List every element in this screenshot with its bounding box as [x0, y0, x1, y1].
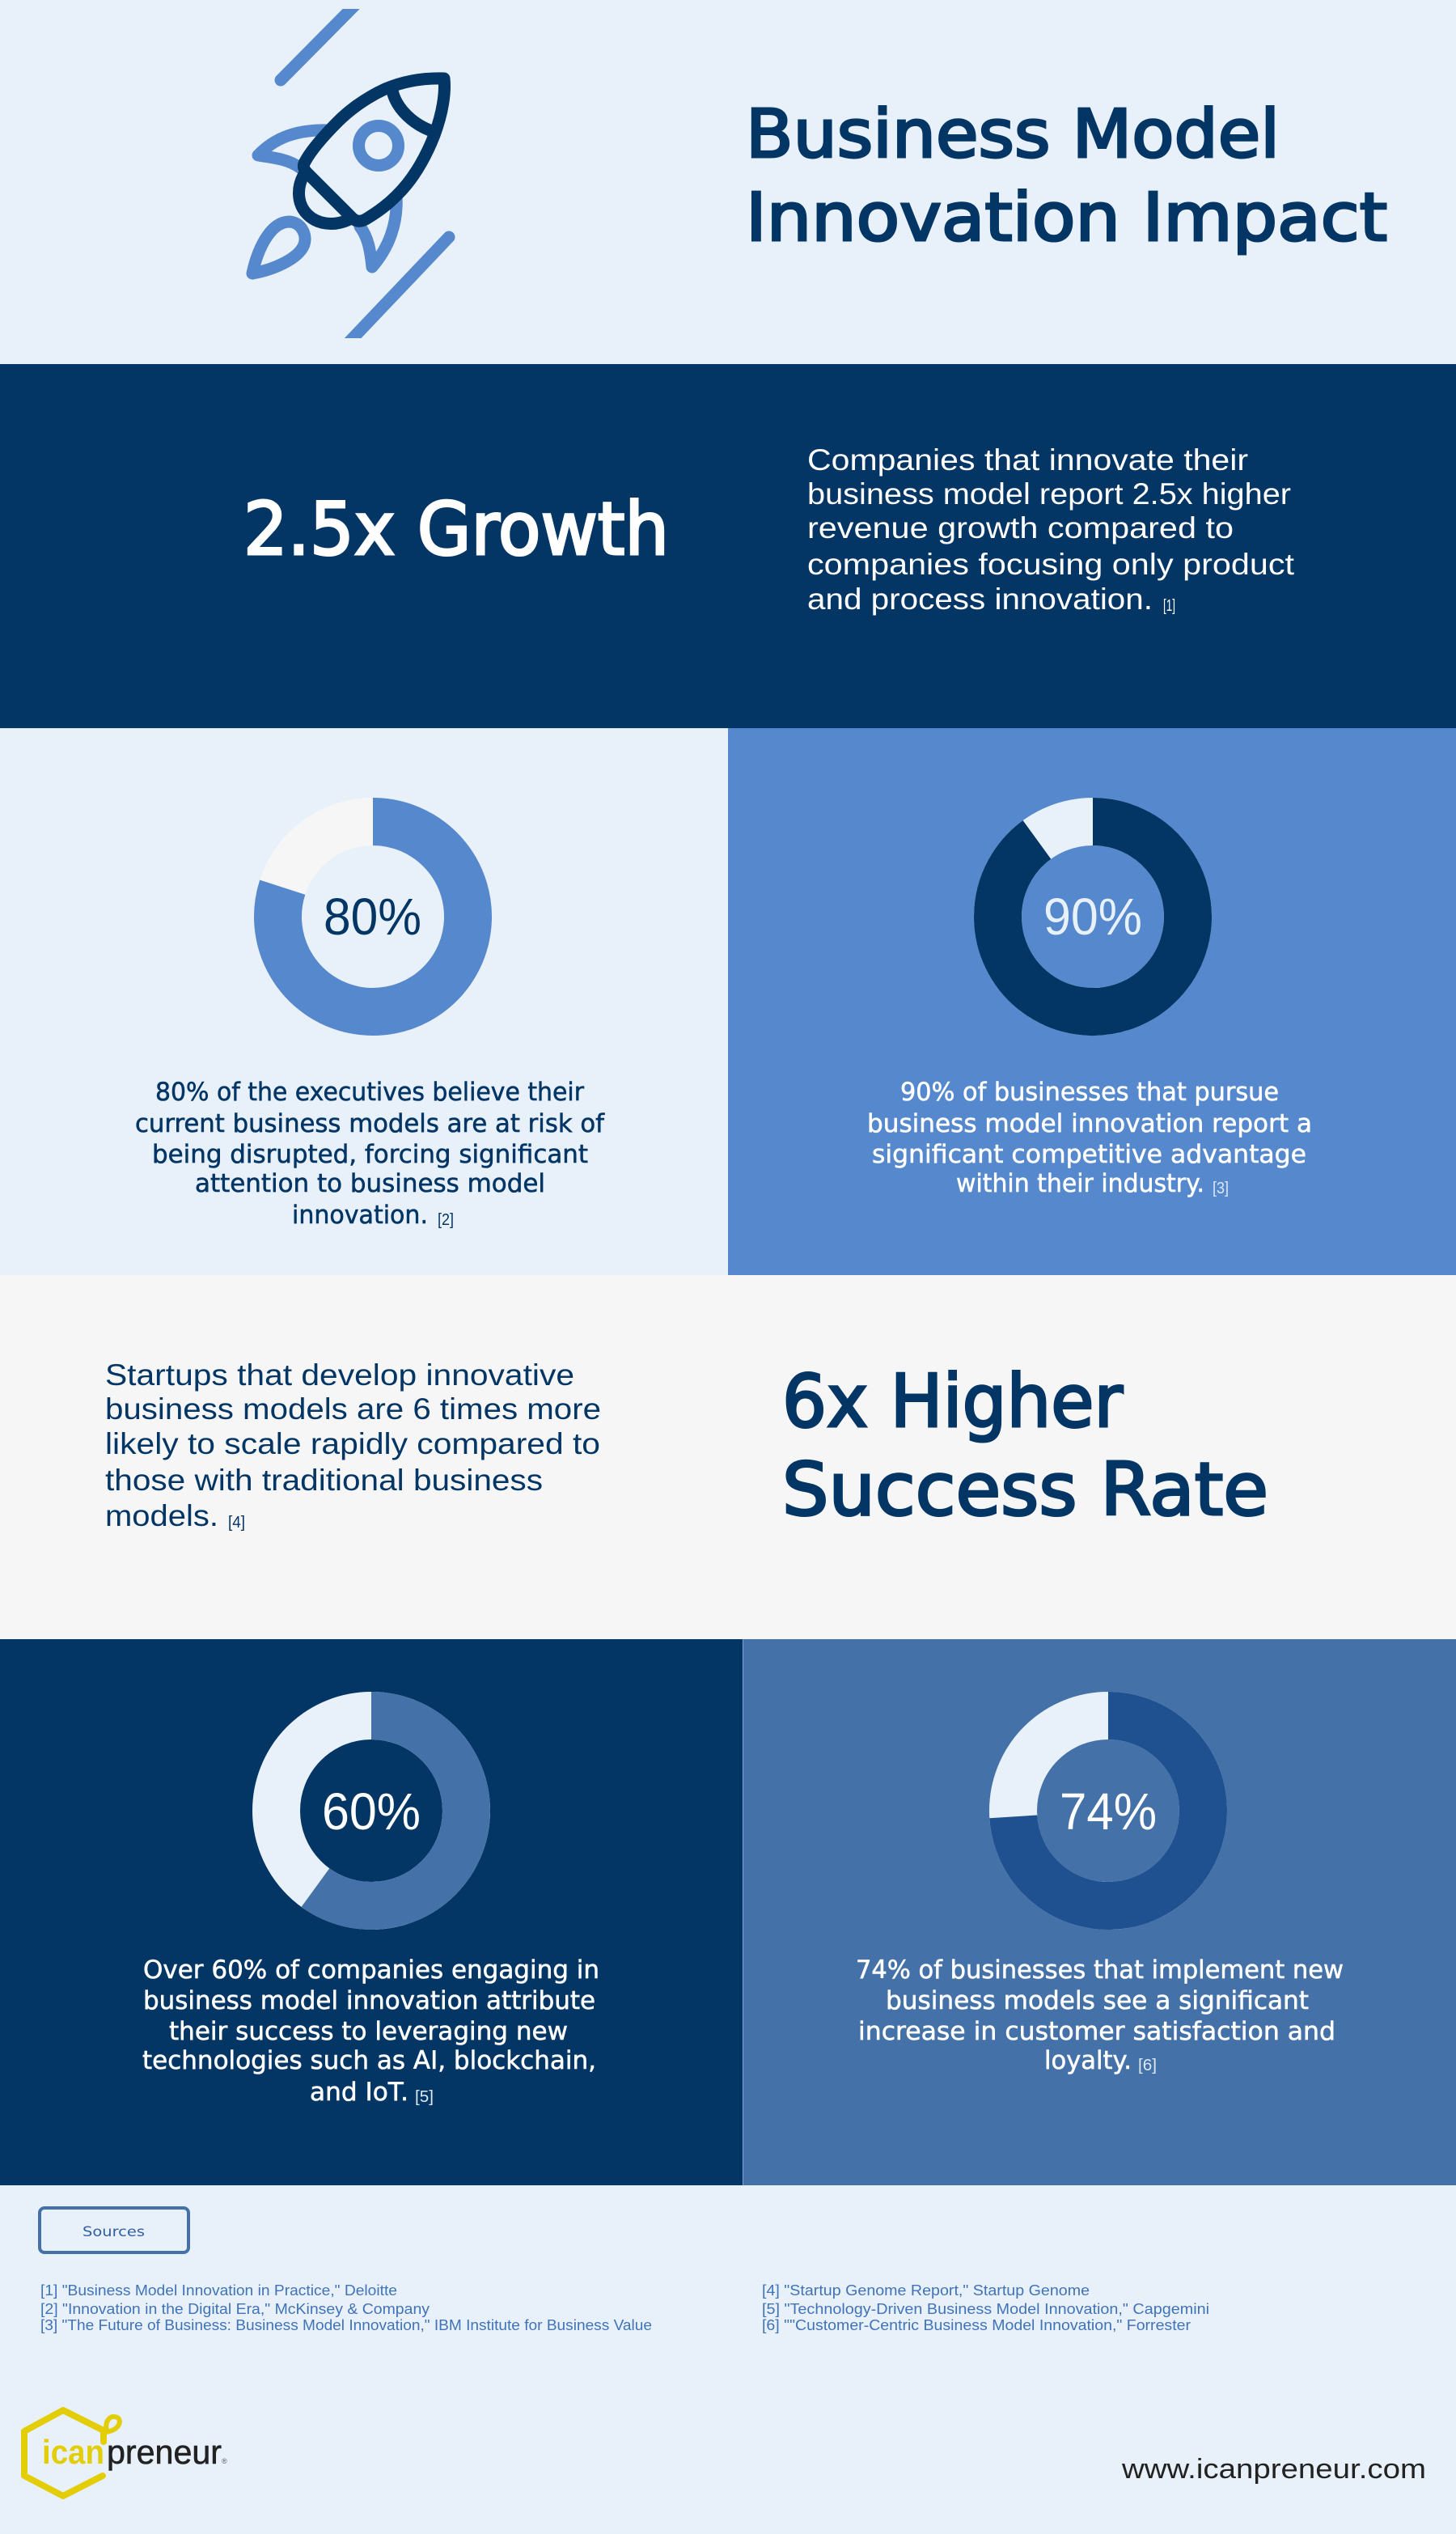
panel: 60% companies [0, 1639, 743, 2185]
text block: 74% description [856, 1956, 1344, 2075]
source list: left column [40, 2282, 652, 2333]
text block: startups description: models. [105, 1499, 218, 1532]
panel: 74% businesses [743, 1639, 1456, 2185]
text block: 90% description: within their industry. [956, 1169, 1204, 1198]
donut chart: 60%: 60% [322, 1782, 421, 1841]
donut chart: 60% [277, 1715, 467, 1906]
text block: startups description: [4] [228, 1514, 245, 1532]
logo: icanpreneur: ican [42, 2433, 104, 2471]
text block: 60% description: [5] [415, 2088, 434, 2106]
text block: growth description: business model report 2.5x higher [807, 477, 1291, 511]
panel: 90% businesses [728, 728, 1456, 1275]
donut chart: 80% [277, 822, 468, 1012]
text block: 60% description: Over 60% of companies engaging in [143, 1956, 599, 1985]
text block: growth description: companies focusing only product [807, 548, 1295, 581]
source list: right column: [5] "Technology-Driven Business Model Innovation," Capgemini [762, 2301, 1209, 2317]
text block: 74% description: business models see a significant [886, 1986, 1309, 2015]
text block: 90% description [867, 1078, 1312, 1198]
source list: left column: [3] "The Future of Business: Business Model Innovation," IBM Institute for Business Value [40, 2317, 652, 2333]
text block: growth description [807, 443, 1295, 616]
text block: startups description: those with traditional business [105, 1464, 543, 1497]
title: Business Model [746, 96, 1280, 173]
text block: 74% description: increase in customer satisfaction and [858, 2017, 1335, 2046]
text block: 90% description: [3] [1213, 1180, 1229, 1197]
text block: 90% description: business model innovation report a [867, 1109, 1312, 1138]
text block: 80% description: 80% of the executives believe their [155, 1078, 584, 1107]
donut chart: 90%: 90% [1043, 888, 1142, 946]
logo: icanpreneur: ® [222, 2457, 227, 2465]
text block: 90% description: 90% of businesses that pursue [900, 1078, 1279, 1107]
text block: startups description [105, 1358, 601, 1532]
text block: 80% description [135, 1078, 605, 1230]
text block: growth description: Companies that innovate their [807, 443, 1248, 477]
panel: footer [0, 2185, 1456, 2534]
panel: 6x higher success rate [0, 1275, 1456, 1639]
text block: startups description: business models are 6 times more [105, 1392, 601, 1426]
source list: right column: [4] "Startup Genome Report," Startup Genome [762, 2282, 1090, 2299]
source list: right column [762, 2282, 1209, 2333]
text block: growth description: [1] [1163, 597, 1175, 615]
text block: 80% description: being disrupted, forcing significant [152, 1140, 588, 1169]
text block: 80% description: attention to business model [195, 1169, 545, 1198]
panel: 80% executives [0, 728, 728, 1275]
text block: 60% description: their success to leveraging new [169, 2017, 568, 2046]
panel: header [246, 9, 1387, 338]
text block: 60% description: and IoT. [310, 2078, 408, 2107]
heading: 2.5x Growth: 2.5x Growth [243, 487, 669, 572]
title: Innovation Impact [746, 180, 1387, 256]
logo: icanpreneur: preneur [107, 2433, 222, 2471]
source list: left column: [2] "Innovation in the Digital Era," McKinsey & Company [40, 2301, 430, 2317]
sources button [40, 2208, 188, 2252]
text block: 90% description: significant competitive advantage [872, 1140, 1306, 1169]
icon: rocket [252, 0, 449, 352]
website url: www.icanpreneur.com [1121, 2454, 1426, 2485]
text block: 60% description [142, 1956, 599, 2107]
text block: growth description: and process innovation. [807, 583, 1153, 616]
text block: 80% description: current business models are at risk of [135, 1109, 605, 1138]
heading: 6x Higher Success Rate: 6x Higher [782, 1359, 1123, 1444]
text block: startups description: likely to scale rapidly compared to [105, 1427, 600, 1460]
title [746, 96, 1387, 256]
text block: 74% description: [6] [1138, 2057, 1157, 2074]
donut chart: 74%: 74% [1060, 1782, 1157, 1841]
sources button: Sources [83, 2224, 145, 2240]
text block: growth description: revenue growth compared to [807, 511, 1234, 545]
text block: 80% description: [2] [438, 1211, 454, 1229]
heading: 6x Higher Success Rate: Success Rate [782, 1447, 1268, 1532]
donut chart: 74% [1013, 1715, 1204, 1906]
source list: right column: [6] ""Customer-Centric Business Model Innovation," Forrester [762, 2317, 1191, 2333]
donut chart: 90% [998, 822, 1188, 1011]
donut chart: 80%: 80% [324, 888, 421, 946]
logo: icanpreneur [24, 2410, 227, 2496]
text block: 74% description: loyalty. [1044, 2046, 1132, 2075]
text block: startups description: Startups that develop innovative [105, 1358, 574, 1392]
panel: 2.5x growth [0, 364, 1456, 728]
source list: left column: [1] "Business Model Innovation in Practice," Deloitte [40, 2282, 397, 2299]
text block: 60% description: business model innovation attribute [143, 1986, 595, 2015]
text block: 74% description: 74% of businesses that implement new [856, 1956, 1344, 1985]
text block: 60% description: technologies such as AI, blockchain, [142, 2046, 596, 2075]
text block: 80% description: innovation. [292, 1201, 428, 1230]
heading: 6x Higher Success Rate [782, 1359, 1268, 1532]
